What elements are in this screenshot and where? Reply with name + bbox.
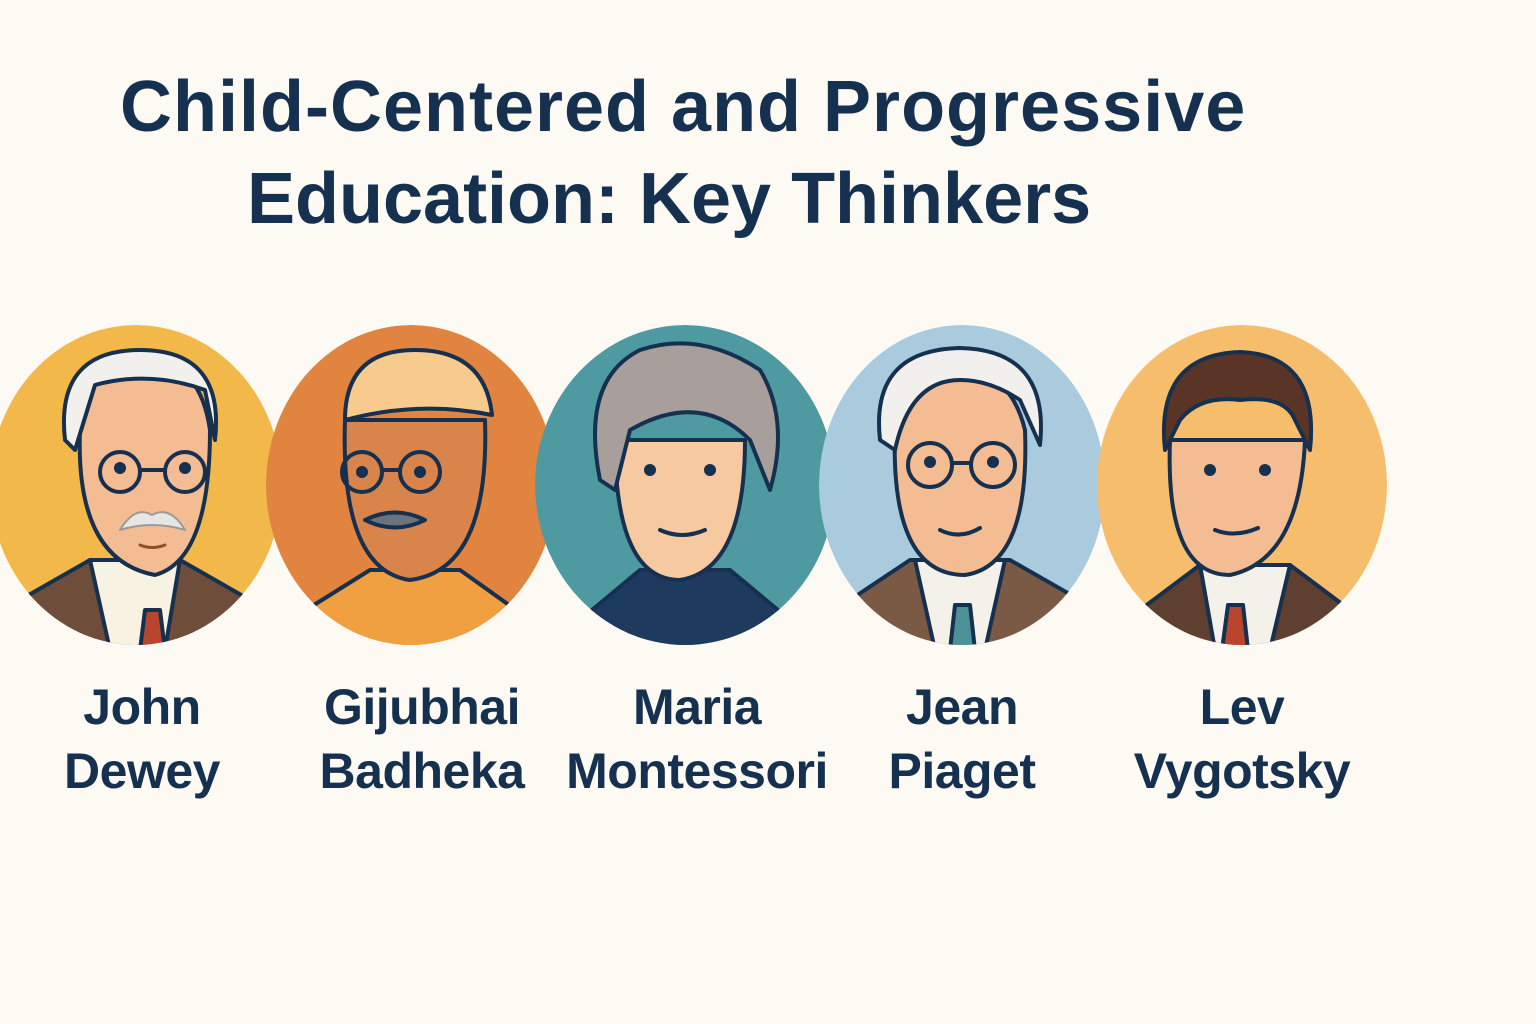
name: Maria Montessori: Maria [633,679,761,735]
title [120,67,1246,239]
portrait: Maria Montessori [535,325,835,660]
portrait: Gijubhai Badheka [266,325,556,660]
title: Education: Key Thinkers [247,159,1091,239]
name: Gijubhai Badheka: Badheka [320,743,524,799]
portrait: Jean Piaget [819,325,1105,660]
name: Gijubhai Badheka [320,679,526,799]
name: Lev Vygotsky: Vygotsky [1134,743,1350,799]
name: Gijubhai Badheka: Gijubhai [324,679,520,735]
portrait: Lev Vygotsky [1097,325,1387,660]
name: John Dewey: Dewey [64,743,220,799]
name: Jean Piaget [888,679,1036,799]
name: John Dewey [64,679,220,799]
name: Lev Vygotsky [1134,679,1350,799]
name: Jean Piaget: Piaget [888,743,1036,799]
name: Maria Montessori: Montessori [566,743,828,799]
name: Lev Vygotsky: Lev [1200,679,1284,735]
name: John Dewey: John [83,679,201,735]
name: Jean Piaget: Jean [906,679,1018,735]
name: Maria Montessori [566,679,828,799]
portrait: John Dewey [0,325,282,660]
title: Child-Centered and Progressive [120,67,1246,147]
portraits row [0,325,1387,645]
